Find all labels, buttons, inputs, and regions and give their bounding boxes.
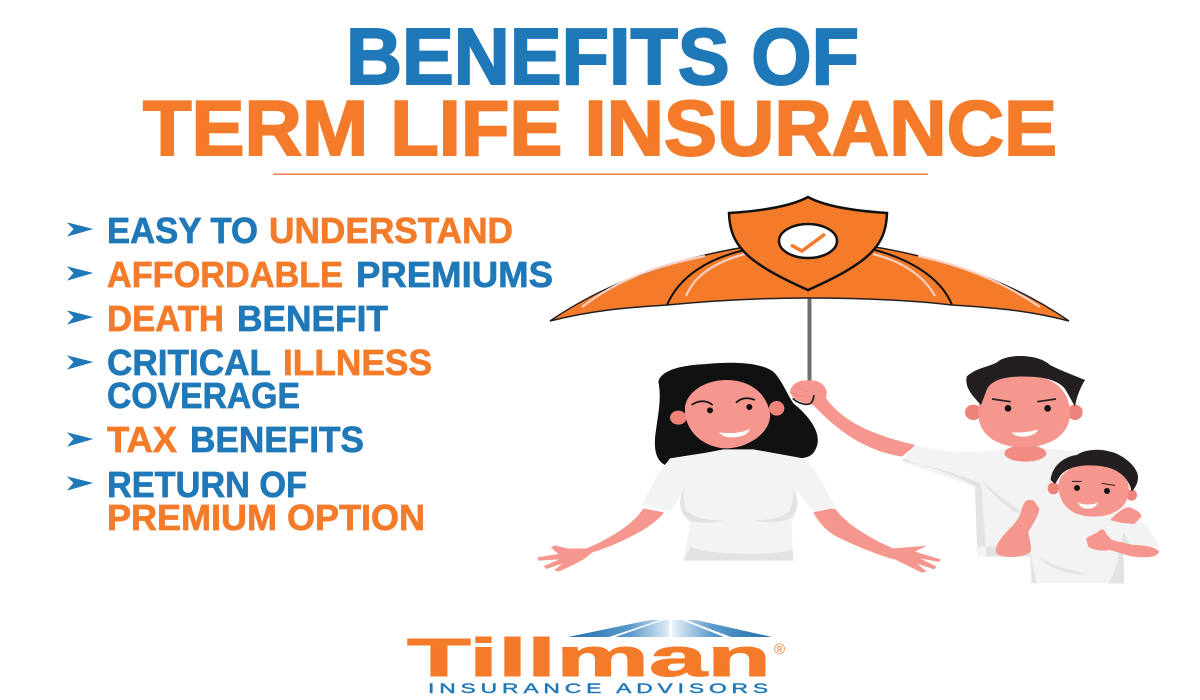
logo wordmark: Tillman: [407, 628, 771, 688]
item: death benefit: BENEFIT: [237, 298, 388, 339]
woman shirt: [642, 449, 835, 561]
item: critical illness coverage: CRITICAL: [107, 342, 271, 383]
logo: [407, 620, 785, 696]
item: easy to understand: UNDERSTAND: [269, 210, 513, 251]
shield: [729, 197, 887, 290]
logo tagline: INSURANCE ADVISORS: [428, 680, 773, 696]
title line 1: BENEFITS OF: [346, 12, 859, 101]
woman hair: [655, 363, 818, 465]
man figure: [790, 356, 1159, 583]
woman's right hand: [813, 508, 941, 573]
item: return of premium option: RETURN OF: [107, 464, 307, 505]
item: affordable premiums: PREMIUMS: [356, 254, 553, 295]
title line 2: TERM LIFE INSURANCE: [143, 84, 1057, 172]
item: affordable premiums: [68, 254, 553, 295]
item: death benefit: DEATH: [107, 298, 224, 339]
item: critical illness coverage: COVERAGE: [107, 375, 300, 416]
man shirt: [902, 444, 1093, 557]
boy arms: [996, 500, 1159, 557]
item: tax benefits: [68, 419, 364, 460]
man raised arm and hand: [790, 380, 916, 457]
item: critical illness coverage: ILLNESS: [283, 342, 432, 383]
check badge: [779, 224, 837, 258]
item: easy to understand: [68, 210, 513, 251]
item: return of premium option: [68, 464, 425, 538]
registered mark: ®: [774, 641, 785, 658]
item: critical illness coverage: [68, 342, 432, 416]
umbrella: [550, 197, 1069, 384]
title: [143, 12, 1057, 172]
logo roof: [568, 620, 772, 637]
man's hand on boy's shoulder: [1110, 507, 1142, 524]
item: affordable premiums: AFFORDABLE: [107, 254, 343, 295]
man neck: [1004, 445, 1046, 462]
item: tax benefits: TAX: [107, 419, 177, 460]
item: easy to understand: EASY TO: [107, 210, 258, 251]
item: return of premium option: PREMIUM OPTION: [107, 497, 425, 538]
woman ears and face: [670, 380, 784, 448]
woman arms: [537, 508, 850, 572]
woman figure: [537, 363, 850, 572]
item: tax benefits: BENEFITS: [190, 419, 364, 460]
boy head: [1048, 450, 1138, 517]
umbrella pole: [808, 298, 812, 384]
boy body: [1028, 507, 1159, 583]
benefits list: [68, 210, 553, 538]
item: death benefit: [68, 298, 388, 339]
man ears, face and hair: [965, 356, 1085, 447]
umbrella canopy: [550, 247, 1069, 321]
